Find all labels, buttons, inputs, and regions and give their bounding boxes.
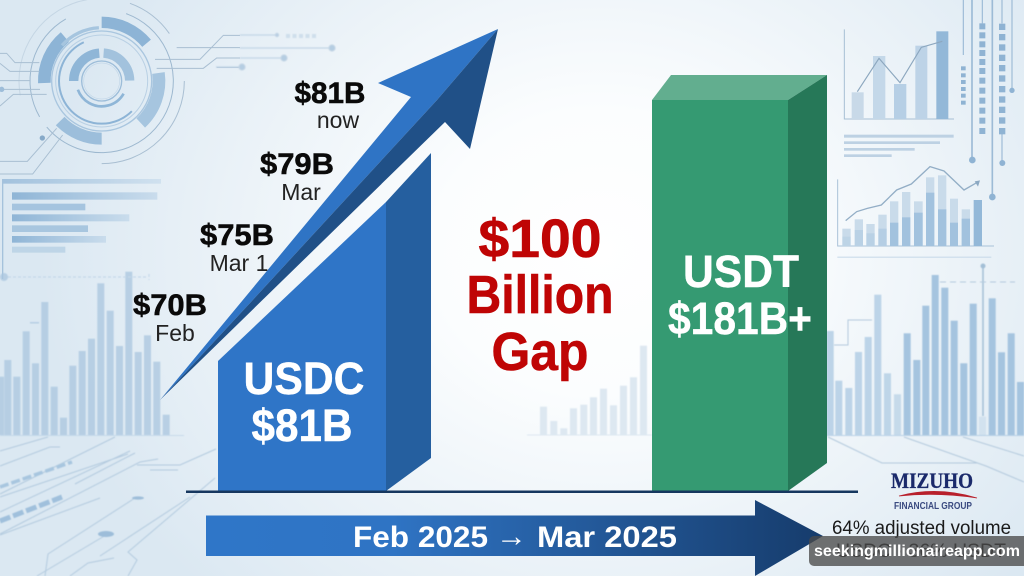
label: $70B Feb bbox=[133, 289, 207, 346]
timeline label: Mar 2025 bbox=[537, 521, 677, 554]
label: $79B Mar: Mar bbox=[281, 179, 321, 205]
watermark: seekingmillionaireapp.com bbox=[809, 536, 1024, 566]
logo: Mizuho Financial Group: MIZUHO bbox=[891, 468, 973, 493]
chart: right vertical bars bbox=[826, 275, 1024, 436]
arrow: rising growth arrow bbox=[160, 29, 498, 400]
callout: $100 Billion Gap: Gap bbox=[492, 322, 588, 382]
logo: Mizuho Financial Group: FINANCIAL GROUP bbox=[894, 501, 972, 512]
logo: Mizuho Financial Group bbox=[891, 468, 977, 512]
bar front: USDT bbox=[652, 100, 788, 491]
bar top: USDT bbox=[652, 75, 827, 100]
label: $79B Mar: $79B bbox=[260, 148, 334, 181]
bar side: USDC bbox=[386, 153, 431, 491]
icon: circular tech gear bbox=[0, 0, 240, 187]
timeline label: → bbox=[496, 520, 527, 553]
watermark: seekingmillionaireapp.com: seekingmillionaireapp.com bbox=[814, 543, 1020, 560]
bar label: USDT $181B+ bbox=[668, 246, 812, 344]
baseline axis bbox=[186, 490, 858, 493]
chart: top right bar and line chart bbox=[844, 0, 1015, 200]
arrow: timeline Feb 2025 to Mar 2025 bbox=[206, 500, 823, 576]
label: $75B Mar 1: $75B bbox=[200, 219, 274, 252]
chart: center faint bars bbox=[527, 346, 652, 436]
callout: $100 Billion Gap: Billion bbox=[466, 265, 614, 325]
chart: left horizontal bars bbox=[2, 179, 161, 279]
panel: bottom left perspective circuit lines bbox=[0, 437, 216, 576]
bar: USDC bbox=[218, 153, 431, 491]
text: volume share note: USDC · 36% USDT bbox=[836, 541, 1006, 562]
panel: top circuit traces bbox=[216, 33, 335, 70]
bar label: USDT $181B+: $181B+ bbox=[668, 293, 812, 344]
timeline label: Feb 2025 bbox=[353, 521, 488, 554]
bar side: USDT bbox=[788, 75, 827, 491]
label: $70B Feb: Feb bbox=[155, 320, 195, 346]
label: $81B now: now bbox=[317, 107, 359, 133]
label: $81B now: $81B bbox=[294, 77, 366, 110]
bar label: USDC $81B bbox=[244, 353, 364, 451]
bar label: USDC $81B: $81B bbox=[252, 400, 352, 451]
chart: left vertical bars bbox=[0, 272, 184, 436]
panel: right circuit traces bbox=[828, 264, 1024, 482]
data labels: USDC growth milestones bbox=[133, 77, 366, 346]
bar: USDT bbox=[652, 75, 827, 491]
bar label: USDC $81B: USDC bbox=[244, 353, 364, 404]
label: $75B Mar 1: Mar 1 bbox=[210, 250, 268, 276]
label: $70B Feb: $70B bbox=[133, 289, 207, 322]
callout: $100 Billion Gap: $100 bbox=[478, 209, 602, 269]
text: volume share note bbox=[832, 518, 1011, 562]
timeline label bbox=[353, 520, 677, 554]
chart: right stacked bars with trend line bbox=[837, 167, 994, 258]
text: volume share note: 64% adjusted volume bbox=[832, 518, 1011, 539]
label: $81B now bbox=[294, 77, 366, 133]
callout: $100 Billion Gap bbox=[466, 209, 614, 382]
bar front: USDC bbox=[218, 202, 386, 491]
label: $79B Mar bbox=[260, 148, 334, 205]
label: $75B Mar 1 bbox=[200, 219, 274, 276]
bar label: USDT $181B+: USDT bbox=[683, 246, 799, 297]
